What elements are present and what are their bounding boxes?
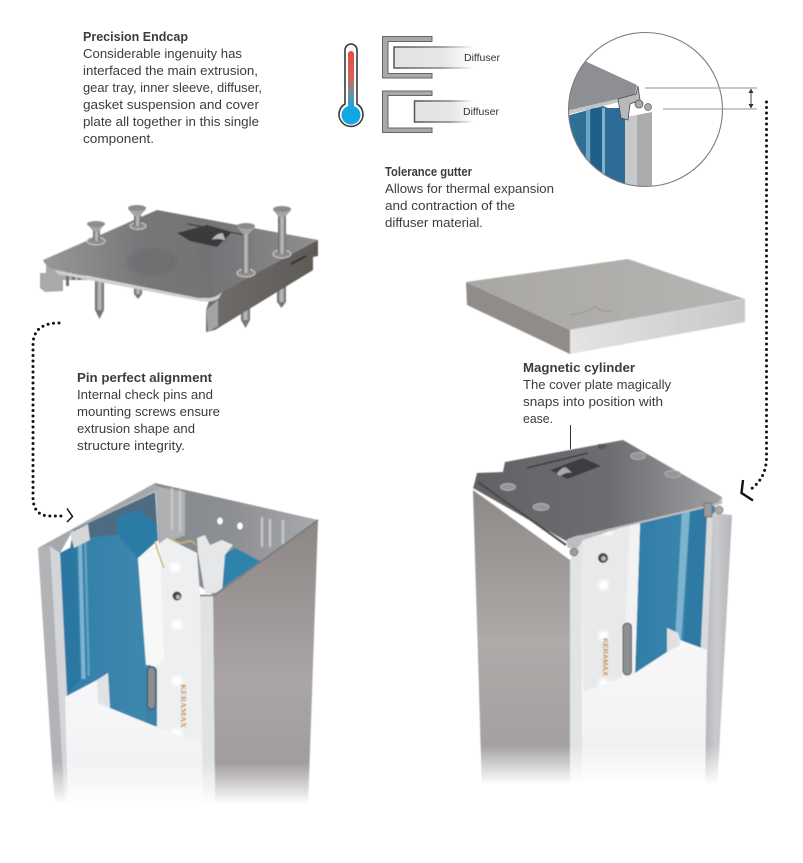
text block: Pin perfect alignment: extrusion shape and xyxy=(77,422,195,436)
diagram: tolerance gutter expanded diffuser xyxy=(382,36,501,78)
text block: Tolerance gutter xyxy=(385,165,554,230)
plate screws xyxy=(500,452,681,510)
text block: Precision Endcap xyxy=(83,30,262,146)
right outer panel xyxy=(213,520,318,808)
label: Diffuser top: Diffuser xyxy=(464,53,501,64)
interior back wall xyxy=(155,483,318,595)
base cleanup: left xyxy=(30,804,325,812)
icon: thermometer xyxy=(339,44,363,126)
board screw xyxy=(598,553,608,563)
text block: Magnetic cylinder: Magnetic cylinder xyxy=(523,361,635,375)
lower screws xyxy=(95,280,286,328)
magnified circle: tolerance gutter detail xyxy=(566,32,757,190)
illustration: precision endcap xyxy=(40,205,318,332)
brand label: KERAMAX xyxy=(179,684,188,729)
text block: Pin perfect alignment: Pin perfect alignment xyxy=(77,371,213,385)
text block: Tolerance gutter: Allows for thermal expansion xyxy=(385,182,554,196)
text block: Magnetic cylinder: snaps into position with xyxy=(523,395,663,409)
arrow: tolerance dimension xyxy=(748,88,754,108)
top plate xyxy=(473,440,722,541)
text block: Pin perfect alignment: structure integrity. xyxy=(77,439,185,453)
top plate xyxy=(43,210,318,298)
text block: Magnetic cylinder: ease. xyxy=(523,412,553,426)
centre shading xyxy=(126,248,178,276)
rear right blue part xyxy=(220,548,262,590)
text block: Precision Endcap: Precision Endcap xyxy=(83,30,188,44)
diagram: tolerance gutter contracted diffuser xyxy=(382,91,500,132)
fade: left extrusion base xyxy=(30,762,325,804)
text block: Tolerance gutter: Tolerance gutter xyxy=(385,165,472,179)
upper screws xyxy=(87,205,291,277)
left tab xyxy=(40,262,88,292)
arrow: dotted line to left extrusion xyxy=(33,323,72,522)
leader line: magnetic cylinder xyxy=(570,425,572,449)
arrow: dotted line to right column corner xyxy=(742,102,766,500)
text block: Pin perfect alignment: mounting screws ensure xyxy=(77,405,220,419)
base cleanup: right xyxy=(465,784,740,792)
side wall xyxy=(206,240,318,332)
illustration: right extrusion assembly xyxy=(473,440,732,790)
LED board xyxy=(138,538,202,743)
illustration: left extrusion assembly xyxy=(38,483,318,808)
front corner strip xyxy=(570,537,582,790)
main blue face xyxy=(60,535,158,727)
LEDs xyxy=(599,529,612,687)
text block: Pin perfect alignment xyxy=(77,371,220,453)
white diffuser xyxy=(582,628,707,790)
magnet cut-out xyxy=(623,623,632,675)
dimension lines xyxy=(645,88,757,109)
text block: Pin perfect alignment: Internal check pins and xyxy=(77,388,213,402)
white ribs behind board xyxy=(197,535,233,594)
text block: Magnetic cylinder: The cover plate magically xyxy=(523,378,672,392)
left outer strip xyxy=(38,546,68,808)
text block: Tolerance gutter: diffuser material. xyxy=(385,216,483,230)
text block: Precision Endcap: component. xyxy=(83,132,154,146)
illustration: cover plate xyxy=(466,259,745,354)
gutter clips xyxy=(570,548,578,556)
text block: Magnetic cylinder xyxy=(523,361,672,426)
fade: right extrusion base xyxy=(465,745,740,784)
label: Diffuser bottom: Diffuser xyxy=(463,107,500,118)
magnet cut-out xyxy=(146,666,157,727)
board screw xyxy=(172,592,182,600)
text block: Precision Endcap: plate all together in this single xyxy=(83,115,259,129)
blue block xyxy=(117,510,157,558)
text block: Precision Endcap: interfaced the main extrusion, xyxy=(83,64,258,78)
magnet slot xyxy=(177,225,232,247)
text block: Precision Endcap: gear tray, inner sleeve, diffuser, xyxy=(83,81,262,95)
text block: Precision Endcap: gasket suspension and cover xyxy=(83,98,259,112)
right outer strip xyxy=(700,513,732,790)
text block: Tolerance gutter: and contraction of the xyxy=(385,199,515,213)
left outer panel xyxy=(473,490,570,790)
LED board xyxy=(582,523,640,692)
LEDs xyxy=(170,563,182,738)
text block: Precision Endcap: Considerable ingenuity has xyxy=(83,47,242,61)
dark rear blue wall xyxy=(70,492,158,558)
brand label: KERAMAX xyxy=(601,638,608,676)
blue extrusion xyxy=(635,505,715,673)
white diffuser xyxy=(65,673,203,808)
magnet slot xyxy=(550,458,601,479)
